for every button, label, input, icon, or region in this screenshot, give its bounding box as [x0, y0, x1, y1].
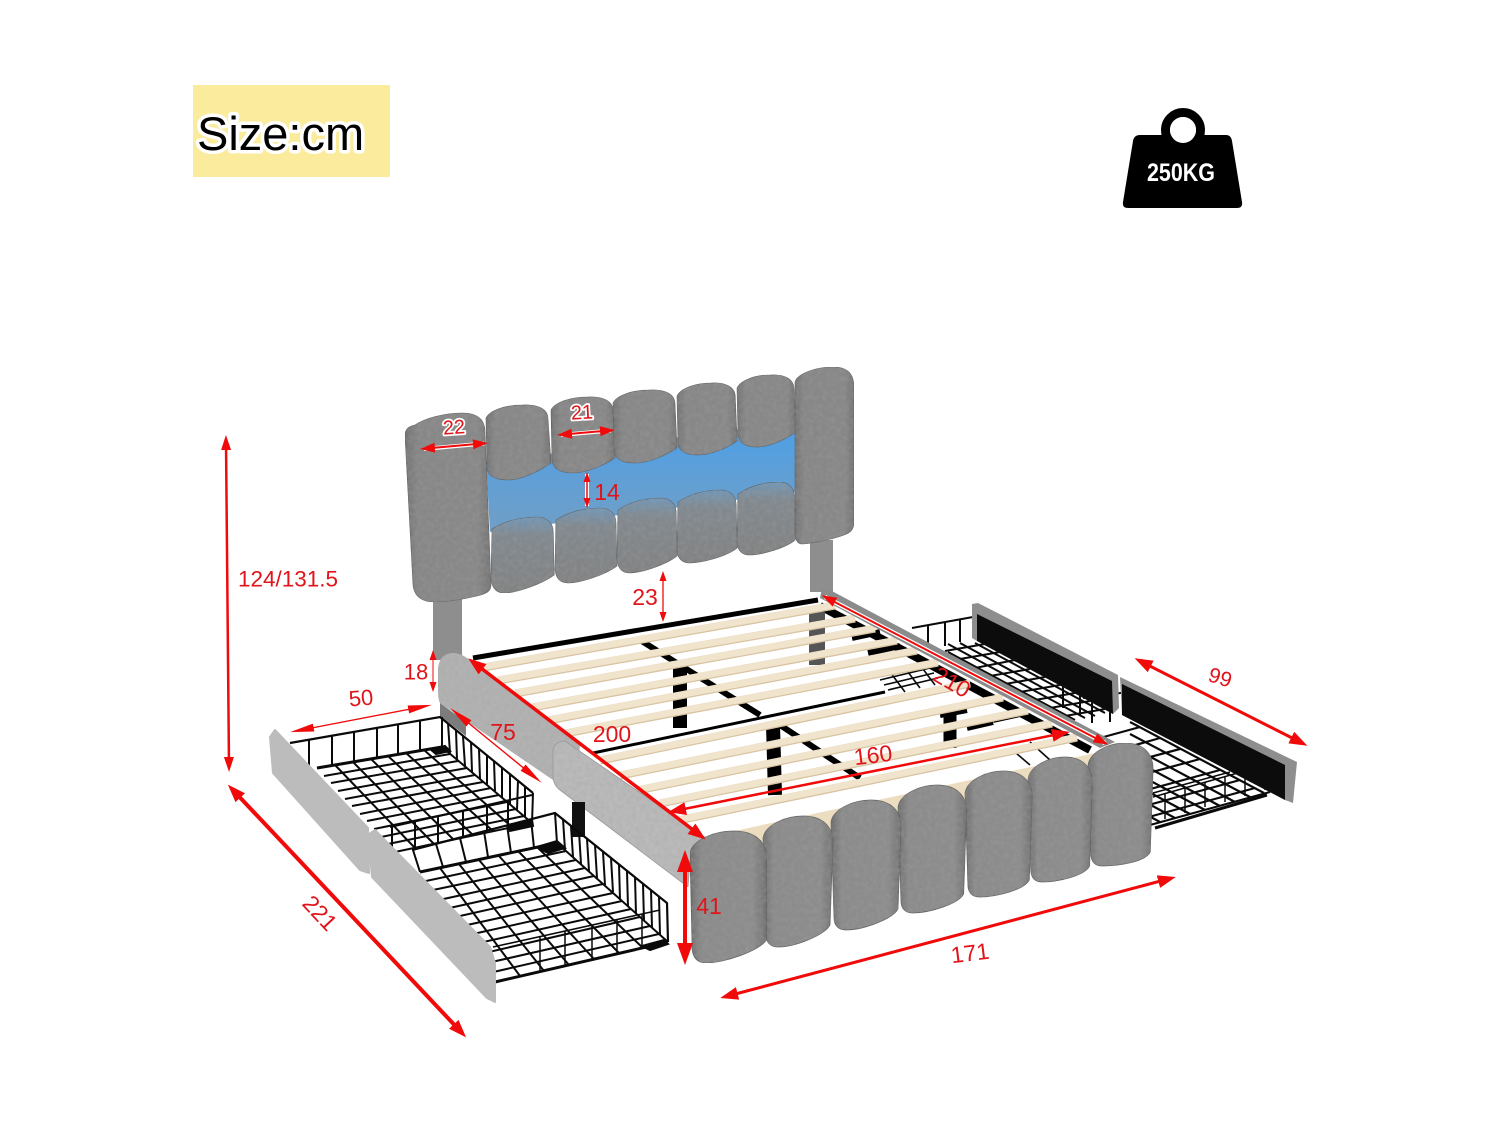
dimension: inner width 160: 160 [852, 740, 894, 770]
black head rail and centre beam [473, 600, 1090, 795]
dimension: pillar width 22 [424, 416, 484, 449]
dimension: drawer depth 75: 75 [490, 719, 516, 745]
front right drawer front [1120, 677, 1297, 803]
wooden bed slats [483, 605, 1077, 821]
left rear wire basket [290, 717, 533, 852]
dimension: inner length 200 [473, 662, 701, 836]
dimension: pillar width 22: 22 [442, 416, 466, 440]
dimension: light gap 14: 14 [594, 479, 620, 505]
size unit label [193, 85, 390, 177]
upper headboard pads and side pillars [405, 367, 854, 602]
dimension: total height 124/131.5: 124/131.5 [238, 566, 338, 592]
lower headboard pads [491, 482, 795, 593]
dimension: total height 124/131.5 [226, 441, 338, 766]
right side rail [820, 588, 1115, 748]
dimension: drawer width 50 [296, 684, 426, 731]
dimension: headboard gap 23: 23 [632, 584, 658, 610]
dimension: clearance 18: 18 [404, 660, 428, 684]
dimension: inner width 160 [674, 733, 1064, 811]
dimension: headboard gap 23 [632, 577, 663, 616]
left rear drawer front [270, 730, 369, 873]
bed frame under-structure [433, 540, 1090, 795]
dimension: drawer width 99: 99 [1205, 664, 1235, 692]
rear right drawer front [972, 603, 1119, 714]
dimension: total width 171: 171 [949, 938, 991, 968]
dimension: drawer depth 75 [455, 712, 537, 779]
size unit label: Size:cm [197, 107, 364, 160]
front right wire basket [1090, 722, 1273, 828]
right-hand storage drawers (pulled out behind bed) [912, 603, 1297, 828]
dimension: total length 221: 221 [297, 890, 343, 936]
footboard wood strip [702, 752, 1105, 858]
dimension: outer rail length 210: 210 [929, 661, 975, 703]
mesh visible through slats [880, 665, 1050, 765]
icon: 250KG weight capacity: 250KG [1147, 159, 1215, 187]
dimension: drawer width 50: 50 [348, 684, 374, 712]
dimension: pad width 21: 21 [570, 401, 594, 425]
rear right wire basket [912, 617, 1128, 723]
blue LED light panel [486, 422, 796, 532]
rail bracket and leg [440, 703, 585, 837]
upholstered footboard pads [690, 743, 1153, 963]
dimension: total length 221 [232, 789, 462, 1033]
left front drawer front [368, 830, 495, 1002]
dimension: clearance 18 [404, 656, 433, 686]
dimension: outer rail length 210 [825, 597, 1105, 743]
dimension: light gap 14 [587, 474, 620, 506]
dimension: inner length 200: 200 [593, 721, 631, 747]
dimension: footboard height 41 [685, 856, 722, 959]
dimension: pad width 21 [561, 401, 611, 435]
dimension: footboard height 41: 41 [696, 893, 722, 919]
dimension: total width 171 [726, 878, 1170, 996]
left front wire basket [412, 813, 668, 982]
dimension: drawer width 99 [1140, 661, 1302, 743]
headboard posts [433, 540, 833, 660]
left side rail [438, 653, 706, 887]
headboard [405, 367, 854, 602]
icon: 250KG weight capacity [1123, 112, 1242, 208]
